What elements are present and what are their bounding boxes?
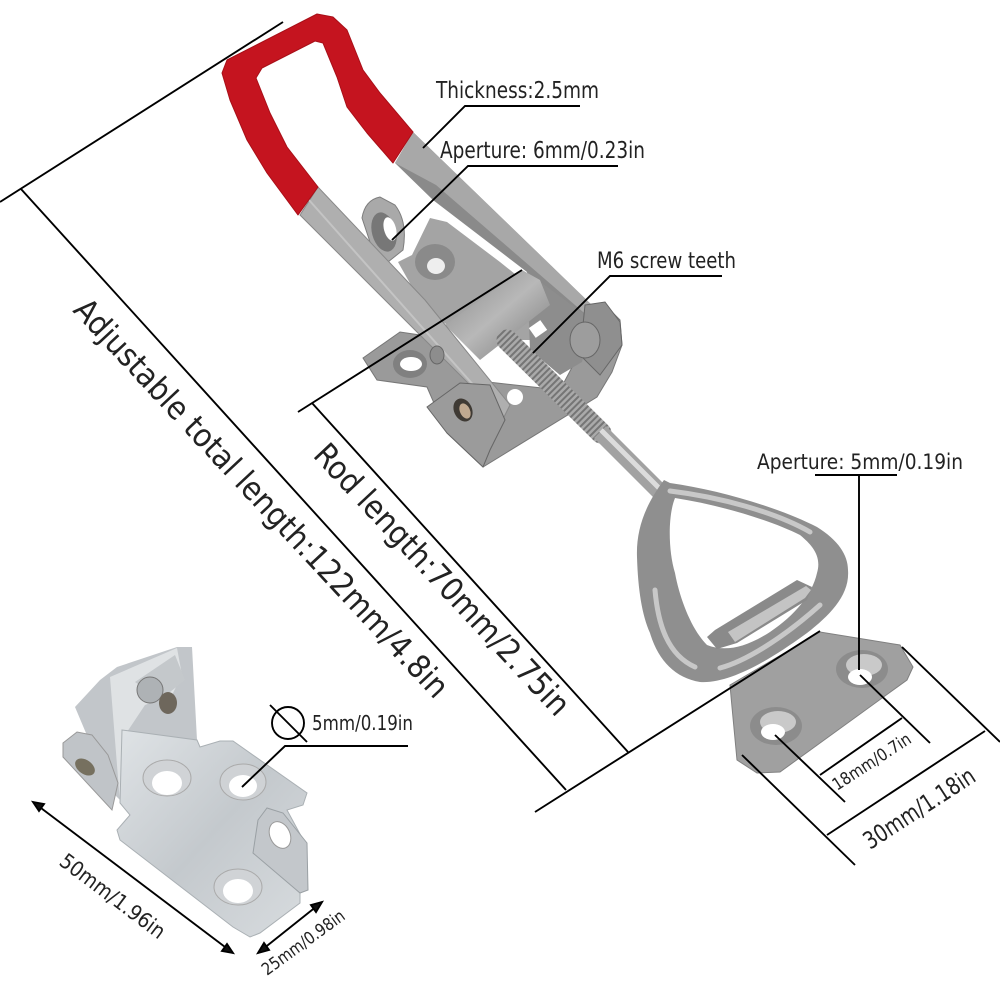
- screw post: [135, 655, 185, 714]
- label: adjustable total length: Adjustable total length:122mm/4.8in: [66, 291, 457, 706]
- hasp hole 2: [836, 650, 888, 688]
- right arm: [395, 132, 597, 330]
- upper plate with hole: [398, 218, 560, 340]
- raised ear: [362, 197, 404, 262]
- 18mm lines: [775, 675, 930, 802]
- lower hole: [507, 389, 523, 405]
- small bracket photo: [63, 647, 308, 937]
- aperture 6mm leader: [392, 166, 618, 240]
- cylinder: [445, 270, 550, 360]
- label: 50mm: 50mm/1.96in: [55, 849, 170, 944]
- left arm: [300, 187, 510, 425]
- mounting base plate: [363, 305, 622, 467]
- adjustable length lines: [0, 22, 820, 812]
- side ear: [63, 732, 118, 810]
- loop highlights: [655, 491, 820, 668]
- label: bracket hole 5mm: 5mm/0.19in: [312, 711, 413, 735]
- wire loop: [637, 480, 848, 682]
- smooth rod: [600, 432, 663, 495]
- rod length lines: [298, 270, 628, 752]
- plate hole 2: [220, 764, 266, 800]
- label: M6 screw teeth: M6 screw teeth: [597, 249, 736, 274]
- aperture 5mm leader: [815, 475, 897, 670]
- main plate: [117, 730, 307, 937]
- channel behind cylinder: [527, 272, 592, 375]
- hasp hole 1: [750, 707, 802, 745]
- 30mm lines: [742, 647, 1000, 865]
- base hole: [393, 350, 427, 378]
- M6 leader: [533, 276, 722, 353]
- bracket hole leader: [242, 746, 408, 787]
- right pivot: [570, 302, 622, 375]
- 25mm arrow: [258, 902, 322, 953]
- red handle grip: [222, 14, 413, 215]
- upright wall: [75, 647, 200, 805]
- plate hole 3: [214, 869, 262, 905]
- flat hasp plate: [730, 632, 913, 773]
- threaded rod: [507, 340, 601, 433]
- 50mm arrow: [33, 802, 233, 953]
- label: 30mm: 30mm/1.18in: [858, 762, 981, 855]
- diameter symbol: [270, 705, 307, 742]
- label: rod length: Rod length:70mm/2.75in: [306, 436, 578, 723]
- label: 18mm: 18mm/0.7in: [829, 729, 915, 795]
- label: aperture 6mm: Aperture: 6mm/0.23in: [440, 138, 645, 164]
- label: 25mm: 25mm/0.98in: [258, 906, 349, 980]
- left pivot bracket: [427, 383, 505, 467]
- thickness leader: [423, 106, 580, 148]
- tongue: [707, 580, 812, 649]
- plate hole 1: [143, 760, 191, 796]
- upper plate hole: [415, 244, 455, 280]
- label: thickness: Thickness:2.5mm: [435, 78, 599, 104]
- latch clamp body: [300, 132, 913, 773]
- side tab: [253, 808, 308, 893]
- label: aperture 5mm: Aperture: 5mm/0.19in: [757, 450, 963, 474]
